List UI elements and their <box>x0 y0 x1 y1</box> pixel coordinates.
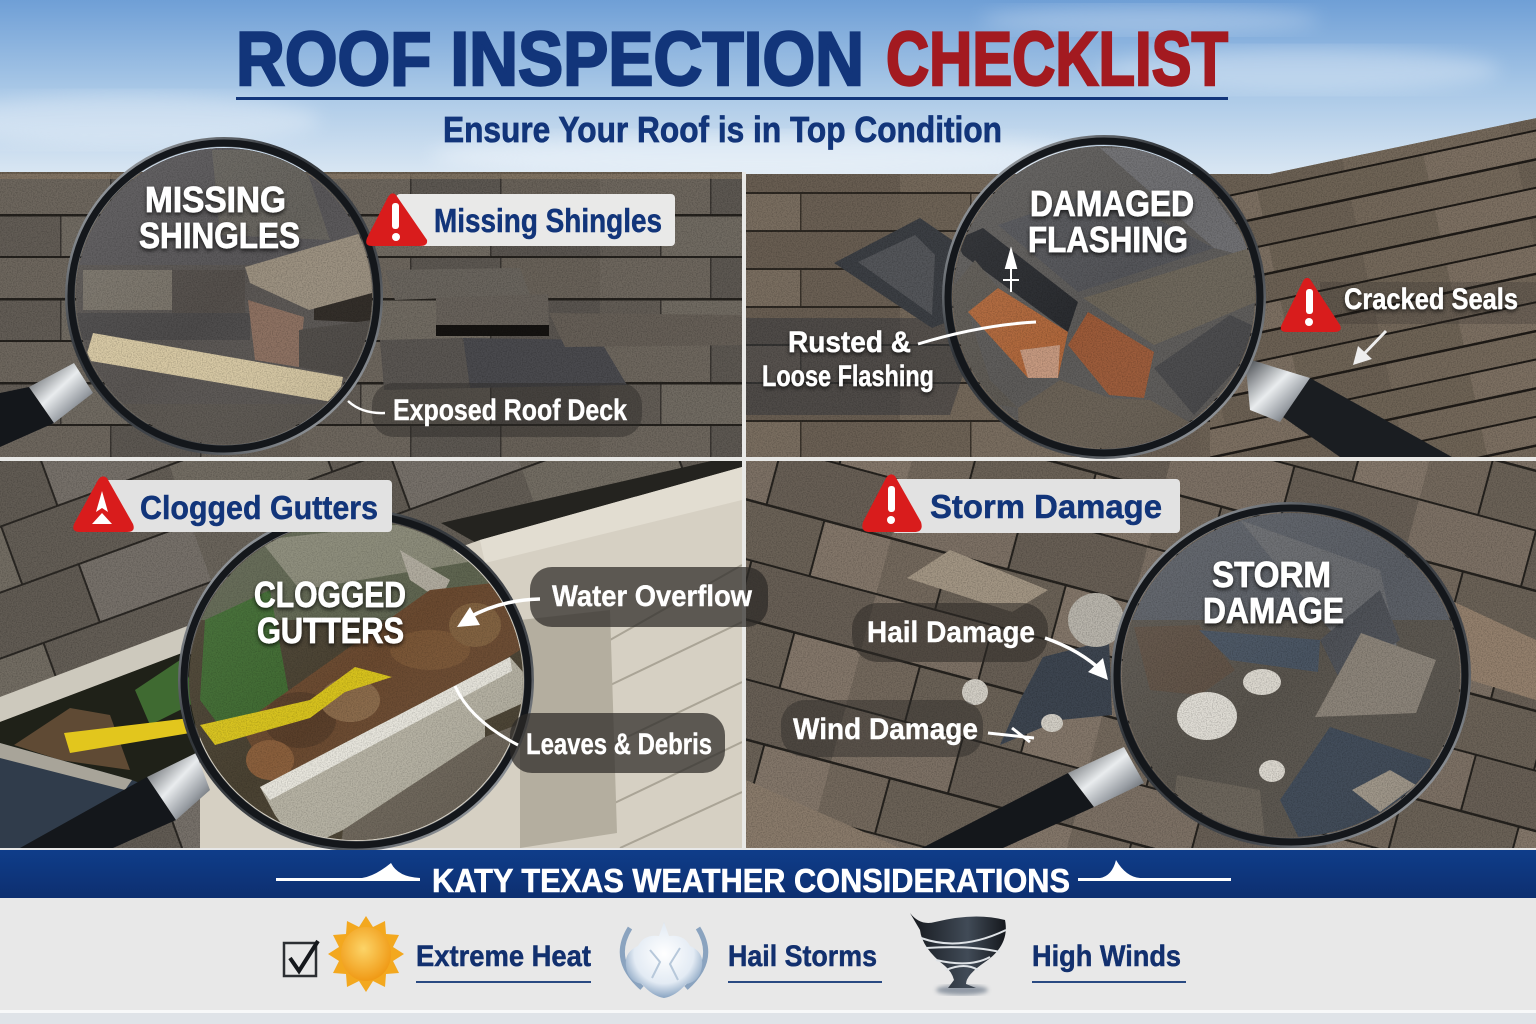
footer background <box>0 898 1536 1024</box>
panel: clogged gutters <box>0 461 768 850</box>
callout: leaves and debris <box>455 686 725 773</box>
callout: missing shingles <box>366 193 675 246</box>
label: hail storms: Hail Storms <box>728 940 877 973</box>
magnifier label: storm damage: DAMAGE <box>1203 590 1344 631</box>
callout: storm damage: Storm Damage <box>930 488 1162 525</box>
sky background <box>0 0 1536 190</box>
callout: exposed roof deck <box>348 383 642 437</box>
title: CHECKLIST <box>886 17 1228 102</box>
magnifier label: damaged flashing: FLASHING <box>1028 219 1188 260</box>
panel: missing shingles <box>0 140 742 460</box>
icon: hail <box>622 922 706 998</box>
magnifier label: missing shingles <box>139 179 300 256</box>
callout: rusted and loose flashing: Loose Flashing <box>762 360 934 393</box>
callout: clogged gutters: Clogged Gutters <box>140 489 378 526</box>
panel: storm damage <box>746 461 1536 850</box>
panel dividers <box>0 172 1536 850</box>
callout: exposed roof deck: Exposed Roof Deck <box>393 394 627 427</box>
callout: wind damage <box>781 700 1034 757</box>
magnifier label: damaged flashing <box>1028 183 1194 260</box>
panel: damaged flashing <box>746 118 1536 460</box>
callout: rusted and loose flashing: Rusted & <box>788 326 911 359</box>
icon: sun <box>328 916 404 992</box>
callout: storm damage <box>862 474 1180 533</box>
icon: tornado <box>910 913 1006 995</box>
callout: leaves and debris: Leaves & Debris <box>526 728 712 761</box>
callout: clogged gutters <box>73 476 392 532</box>
banner: Katy Texas weather considerations: KATY TEXAS WEATHER CONSIDERATIONS <box>432 862 1070 899</box>
magnifier label: damaged flashing: DAMAGED <box>1030 183 1194 224</box>
magnifier label: missing shingles: MISSING <box>145 179 286 220</box>
magnifier: clogged gutters <box>20 510 530 850</box>
callout: wind damage: Wind Damage <box>793 713 978 746</box>
callout: hail damage: Hail Damage <box>867 616 1035 649</box>
callout: cracked seals <box>1281 278 1518 365</box>
title: ROOF INSPECTION <box>236 17 864 102</box>
icon: checkbox <box>284 941 318 976</box>
label: extreme heat: Extreme Heat <box>416 940 591 973</box>
magnifier label: clogged gutters: CLOGGED <box>254 574 406 615</box>
magnifier label: clogged gutters: GUTTERS <box>257 610 404 651</box>
magnifier label: clogged gutters <box>254 574 406 651</box>
magnifier: storm damage <box>922 500 1475 850</box>
magnifier label: storm damage <box>1203 554 1344 631</box>
magnifier label: missing shingles: SHINGLES <box>139 215 300 256</box>
callout: rusted and loose flashing <box>762 322 1036 393</box>
callout: water overflow: Water Overflow <box>552 580 753 613</box>
subtitle: Ensure Your Roof is in Top Condition <box>443 109 1002 150</box>
banner: Katy Texas weather considerations <box>0 850 1536 899</box>
magnifier: damaged flashing <box>947 140 1452 460</box>
callout: water overflow <box>457 567 768 627</box>
magnifier: missing shingles <box>0 140 390 460</box>
callout: hail damage <box>852 603 1108 680</box>
callout: missing shingles: Missing Shingles <box>434 202 662 239</box>
magnifier label: storm damage: STORM <box>1212 554 1331 595</box>
label: high winds: High Winds <box>1032 940 1181 973</box>
